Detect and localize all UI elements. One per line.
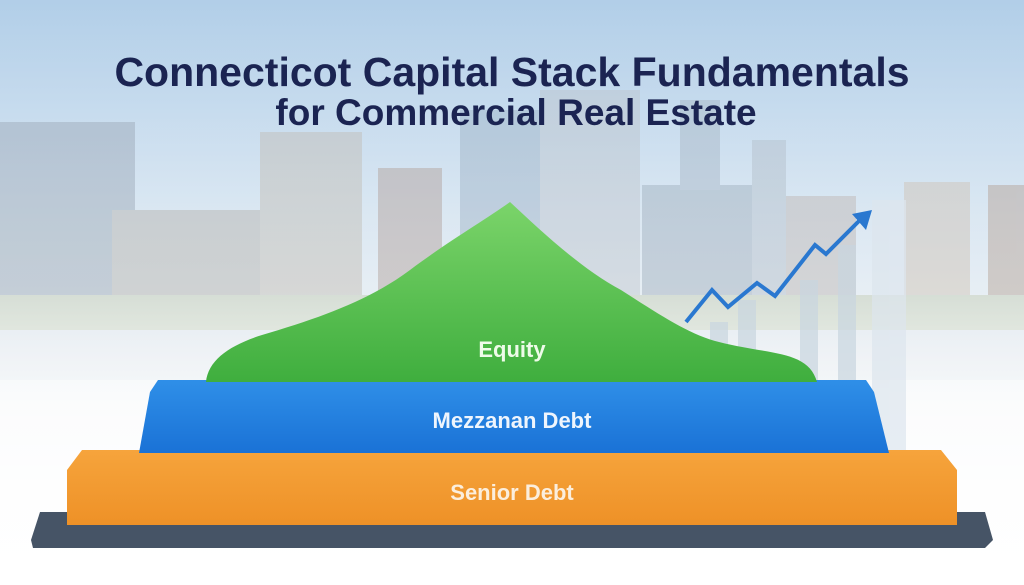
layer: mezzanine debt [139, 380, 889, 453]
title: for Commercial Real Estate [275, 92, 757, 133]
layer: mezzanine debt: Mezzanan Debt [433, 408, 592, 433]
layer: equity: Equity [478, 337, 546, 362]
base plinth [31, 512, 993, 548]
city skyline background [0, 90, 1024, 380]
title [114, 49, 910, 133]
arrow: growth line [686, 210, 872, 322]
layer: senior debt [67, 450, 957, 525]
layer: equity [206, 202, 817, 382]
title: Connecticot Capital Stack Fundamentals [114, 49, 910, 95]
chart: rising bars [710, 200, 906, 450]
layer: senior debt: Senior Debt [450, 480, 574, 505]
